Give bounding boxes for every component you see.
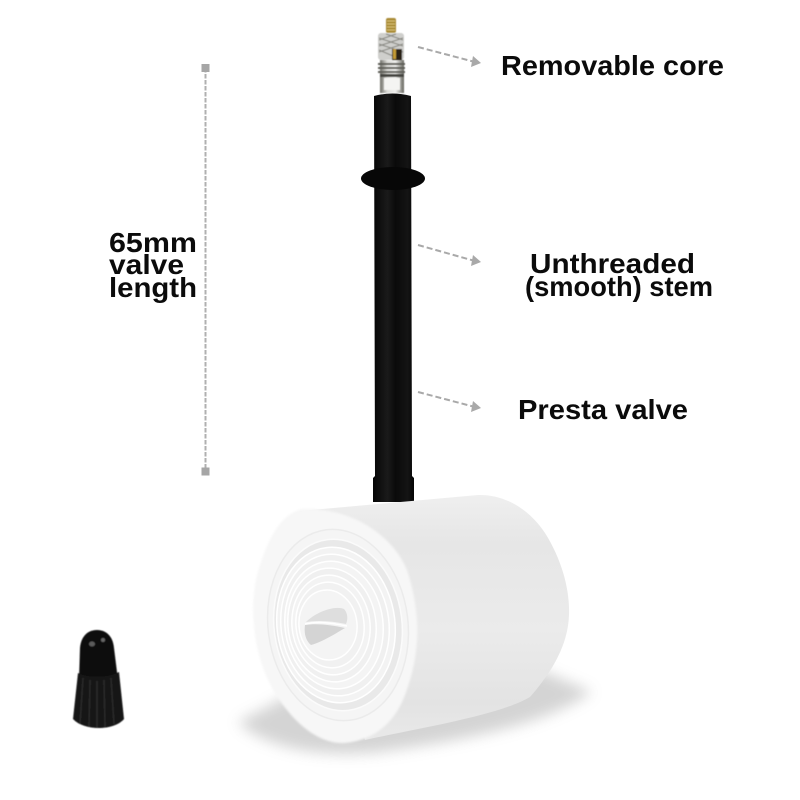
knurled nut (378, 33, 404, 61)
tube roll (253, 495, 569, 743)
dimension line: 65mm valve length (202, 64, 210, 476)
label: unthreaded smooth stem (525, 248, 713, 302)
valve assembly (361, 18, 425, 502)
valve core tip (386, 18, 396, 33)
roll body (300, 495, 569, 740)
centre slit (305, 608, 347, 645)
threaded metal base (378, 60, 405, 93)
roll shadow (238, 670, 592, 754)
label: 65mm valve length: valve (109, 249, 184, 280)
label: 65mm valve length (109, 227, 197, 303)
label: 65mm valve length: length (109, 272, 197, 303)
valve cap (73, 630, 124, 728)
black stem (373, 94, 414, 502)
label: presta valve: Presta valve (518, 394, 688, 425)
label: 65mm valve length: 65mm (109, 227, 197, 258)
roll face (253, 509, 419, 743)
arrow: presta valve (418, 392, 481, 412)
label: unthreaded smooth stem: Unthreaded (530, 248, 695, 279)
arrow: unthreaded stem (418, 245, 481, 266)
arrow: removable core (418, 47, 481, 67)
label: removable core: Removable core (501, 50, 724, 81)
label: unthreaded smooth stem: (smooth) stem (525, 271, 713, 302)
rubber ring (361, 167, 425, 190)
